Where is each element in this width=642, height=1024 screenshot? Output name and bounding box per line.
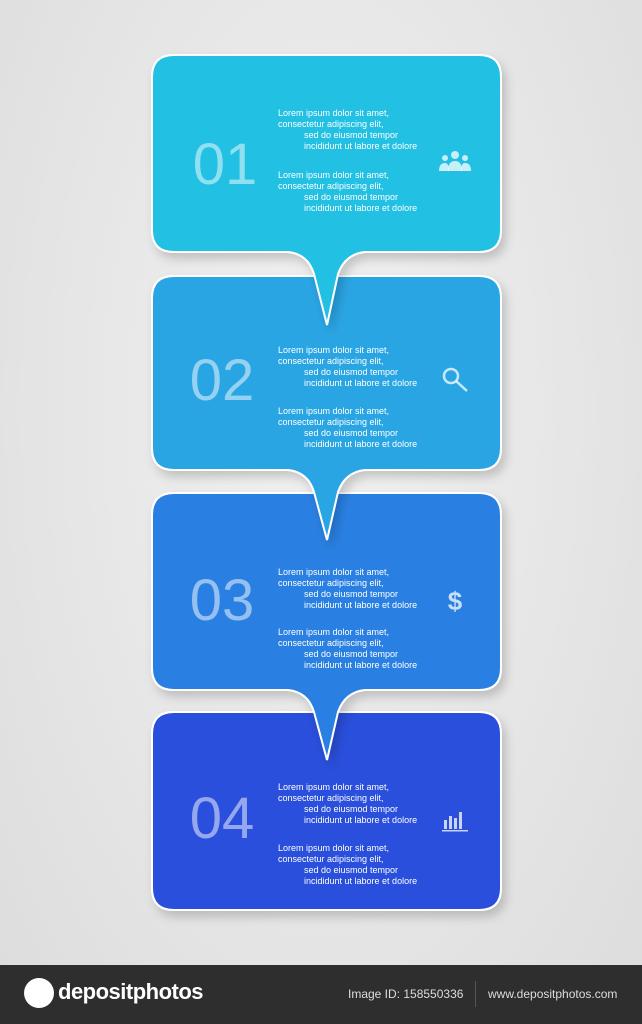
panel: step 04: consectetur adipiscing elit,: [278, 854, 384, 864]
panel: step 02: Lorem ipsum dolor sit amet,: [278, 345, 389, 355]
image id: Image ID: 158550336: [348, 987, 463, 1001]
panel: step 04: [152, 712, 501, 910]
panel: step 03: consectetur adipiscing elit,: [278, 578, 384, 588]
panel: step 04: incididunt ut labore et dolore: [304, 876, 417, 886]
panel: step 04: sed do eiusmod tempor: [304, 804, 398, 814]
panel: step 01: [152, 55, 501, 325]
footer bar: [0, 965, 642, 1024]
panel: step 01: incididunt ut labore et dolore: [304, 203, 417, 213]
panel: step 03: incididunt ut labore et dolore: [304, 600, 417, 610]
icon: magnifier: [444, 369, 467, 391]
website: www.depositphotos.com: [488, 987, 617, 1001]
icon: chart: [442, 812, 468, 832]
panel: step 01: Lorem ipsum dolor sit amet,: [278, 108, 389, 118]
panel: step 04: Lorem ipsum dolor sit amet,: [278, 843, 389, 853]
panel: step 04: incididunt ut labore et dolore: [304, 815, 417, 825]
panel: step 02: Lorem ipsum dolor sit amet,: [278, 406, 389, 416]
panel: step 02: consectetur adipiscing elit,: [278, 356, 384, 366]
panel: step 03: sed do eiusmod tempor: [304, 589, 398, 599]
panel: step 01: sed do eiusmod tempor: [304, 130, 398, 140]
panel: step 03: incididunt ut labore et dolore: [304, 660, 417, 670]
panel: step 02: [152, 276, 501, 540]
panel: step 01: incididunt ut labore et dolore: [304, 141, 417, 151]
panel: step 02: 02: [190, 348, 254, 413]
panel: step 03: 03: [190, 568, 254, 633]
panel: step 04: consectetur adipiscing elit,: [278, 793, 384, 803]
panel: step 02: sed do eiusmod tempor: [304, 367, 398, 377]
panel: step 01: consectetur adipiscing elit,: [278, 119, 384, 129]
panel: step 01: 01: [193, 132, 257, 197]
panel: step 04: sed do eiusmod tempor: [304, 865, 398, 875]
panel: step 04: 04: [190, 786, 254, 851]
icon: dollar: $: [448, 586, 463, 616]
panel: step 03: consectetur adipiscing elit,: [278, 638, 384, 648]
panel: step 01: consectetur adipiscing elit,: [278, 181, 384, 191]
panel: step 03: Lorem ipsum dolor sit amet,: [278, 567, 389, 577]
panel: step 03: sed do eiusmod tempor: [304, 649, 398, 659]
panel: step 02: incididunt ut labore et dolore: [304, 439, 417, 449]
panel: step 02: incididunt ut labore et dolore: [304, 378, 417, 388]
icon: people: [439, 151, 471, 171]
panel: step 03: Lorem ipsum dolor sit amet,: [278, 627, 389, 637]
panel: step 04: Lorem ipsum dolor sit amet,: [278, 782, 389, 792]
panel: step 03: [152, 493, 501, 760]
panel: step 01: Lorem ipsum dolor sit amet,: [278, 170, 389, 180]
logo: depositphotos: [58, 979, 203, 1004]
panel: step 02: consectetur adipiscing elit,: [278, 417, 384, 427]
panel: step 01: sed do eiusmod tempor: [304, 192, 398, 202]
logo: [24, 978, 203, 1008]
panel: step 02: sed do eiusmod tempor: [304, 428, 398, 438]
